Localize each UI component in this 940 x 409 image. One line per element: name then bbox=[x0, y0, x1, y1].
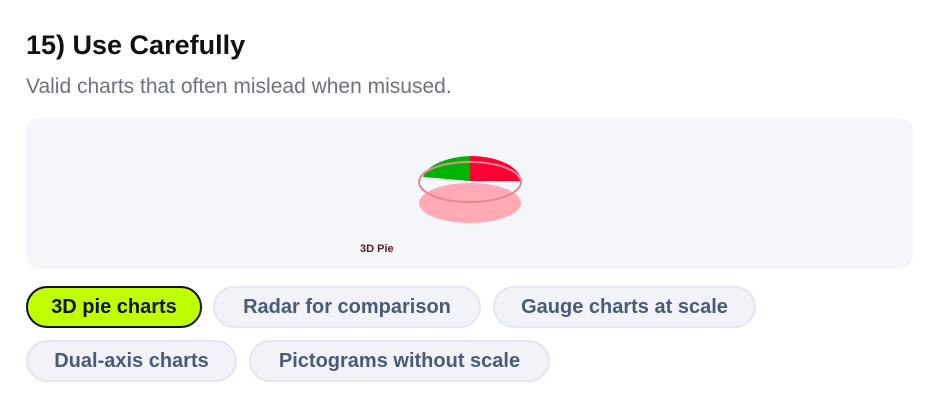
chip: gauge: Gauge charts at scale bbox=[521, 296, 728, 318]
chart label: 3D Pie bbox=[360, 243, 394, 255]
chip: gauge bbox=[493, 286, 756, 328]
title: 15) Use Carefully bbox=[26, 30, 245, 60]
chip: dual-axis: Dual-axis charts bbox=[54, 350, 209, 372]
subtitle: Valid charts that often mislead when misused. bbox=[26, 75, 452, 98]
chip: 3D pie charts (active) bbox=[26, 286, 202, 328]
chip: pictograms: Pictograms without scale bbox=[279, 350, 520, 372]
chip: dual-axis bbox=[26, 340, 237, 382]
chart: 3D pie bbox=[418, 156, 522, 223]
panel: chart preview bbox=[26, 118, 913, 269]
chip: radar: Radar for comparison bbox=[243, 296, 451, 318]
chip: 3D pie charts (active): 3D pie charts bbox=[51, 296, 177, 318]
chip: radar bbox=[213, 286, 481, 328]
chip: pictograms bbox=[249, 340, 550, 382]
